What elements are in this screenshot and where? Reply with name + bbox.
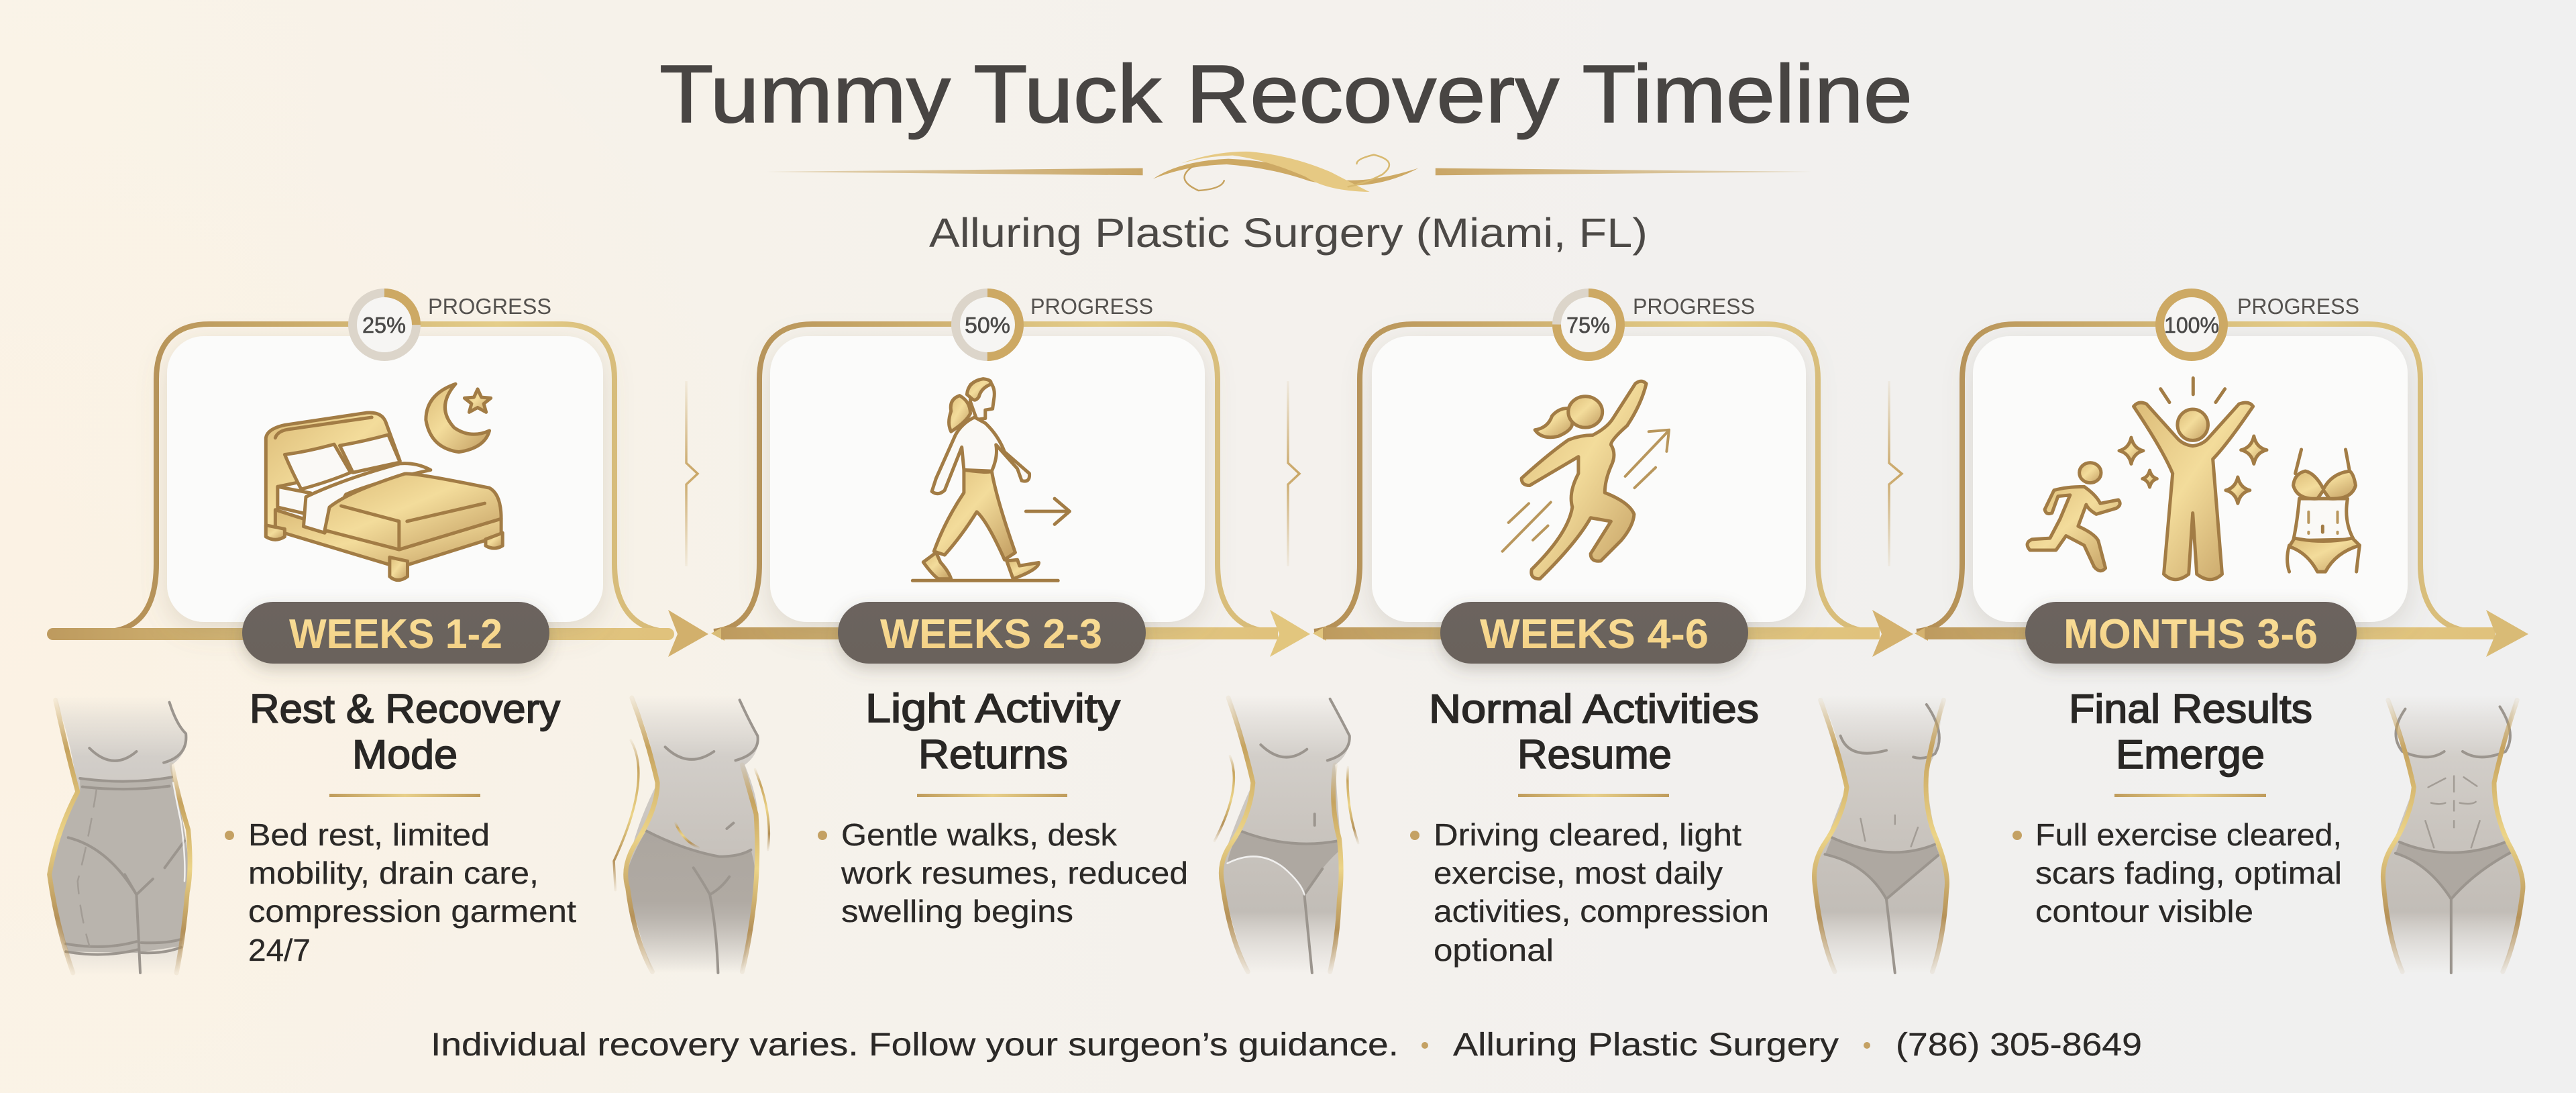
pill: months 3-6: MONTHS 3-6: [2063, 611, 2318, 658]
heading 1: Mode: [352, 732, 458, 777]
card 2: [770, 336, 1205, 622]
heading 2: Returns: [918, 732, 1068, 777]
frame 4: [1917, 324, 2470, 631]
bullet text 4: scars fading, optimal: [2035, 855, 2342, 890]
heading 3: Resume: [1517, 732, 1672, 777]
separator arrow 1: [686, 381, 698, 566]
progress ring 75%: 75%: [1566, 313, 1610, 337]
heading 1: Rest & Recovery: [250, 686, 560, 731]
heading underline 4: [2114, 794, 2266, 797]
ornamental divider: [766, 152, 1812, 192]
torso illustration: swollen abdomen: [614, 696, 769, 973]
heading 3: [1429, 686, 1759, 777]
torso illustration: compression garment: [50, 696, 190, 975]
torso illustration: slimmer waist: [1815, 696, 1947, 973]
footer: [431, 1027, 2142, 1063]
bullet text 1: mobility, drain care,: [248, 855, 539, 890]
heading underline 1: [329, 794, 480, 797]
progress label: PROGRESS: [428, 294, 551, 319]
bullet text 2: Gentle walks, desk: [841, 817, 1118, 852]
pill: weeks 2-3: [838, 602, 1146, 664]
bullet text 4: [2012, 817, 2342, 929]
torso illustration: final contour: [2383, 696, 2523, 973]
footer: (786) 305-8649: [1896, 1027, 2142, 1063]
bullet text 3: Driving cleared, light: [1434, 817, 1741, 852]
panel: weeks 1-2: [47, 293, 708, 664]
card 1: [167, 336, 603, 622]
card 3: [1372, 336, 1806, 622]
pill: weeks 2-3: WEEKS 2-3: [880, 611, 1102, 658]
bullet text 4: Full exercise cleared,: [2035, 817, 2342, 852]
progress label: PROGRESS: [1030, 294, 1153, 319]
title: Tummy Tuck Recovery Timeline: [659, 48, 1913, 140]
icon: active woman reaching up: [1503, 381, 1669, 579]
panel: weeks 4-6: [1313, 293, 1913, 664]
progress ring 75%: [1556, 293, 1621, 357]
panel: months 3-6: [1915, 293, 2528, 664]
heading 4: Emerge: [2116, 732, 2265, 777]
progress ring 100%: [2160, 293, 2223, 357]
bullet text 1: Bed rest, limited: [248, 817, 490, 852]
separator arrow 3: [1889, 381, 1902, 566]
progress ring 50%: [955, 293, 1020, 357]
icon: bed with moon and star: [266, 384, 502, 580]
progress ring 25%: 25%: [362, 313, 406, 337]
footer: Individual recovery varies. Follow your surgeon’s guidance.: [431, 1027, 1399, 1063]
progress ring 100%: 100%: [2164, 313, 2219, 337]
bullet text 1: [225, 817, 576, 968]
bullet text 1: compression garment: [248, 894, 576, 929]
footer: Alluring Plastic Surgery: [1453, 1027, 1839, 1063]
pill: weeks 4-6: WEEKS 4-6: [1480, 611, 1709, 658]
bullet text 3: [1410, 817, 1769, 968]
frame 3: [1314, 324, 1868, 631]
torso illustration: reduced swelling: [1214, 696, 1358, 973]
timeline arrow 2: [711, 610, 1310, 657]
heading 2: Light Activity: [865, 686, 1120, 731]
bullet text 3: activities, compression: [1434, 894, 1769, 929]
panel: weeks 2-3: [711, 293, 1310, 664]
icon: celebrating figure, runner and body: [2027, 378, 2359, 580]
timeline arrow 1: [47, 610, 708, 657]
timeline arrow 3: [1313, 610, 1913, 657]
heading 2: [865, 686, 1120, 777]
progress ring 25%: [353, 293, 416, 357]
pill: weeks 1-2: [242, 602, 549, 664]
heading underline 2: [917, 794, 1067, 797]
icon: walking woman: [912, 379, 1069, 580]
bullet text 2: swelling begins: [841, 894, 1073, 929]
heading 1: [250, 686, 560, 777]
frame 2: [714, 324, 1267, 631]
heading underline 3: [1518, 794, 1669, 797]
separator arrow 2: [1288, 381, 1299, 566]
heading 4: Final Results: [2069, 686, 2312, 731]
card 4: [1973, 336, 2408, 622]
bullet text 4: contour visible: [2035, 894, 2253, 929]
heading 3: Normal Activities: [1429, 686, 1759, 731]
timeline arrow 4: [1915, 610, 2528, 657]
subtitle: Alluring Plastic Surgery (Miami, FL): [929, 210, 1648, 256]
progress ring 50%: 50%: [965, 313, 1010, 337]
bullet text 3: optional: [1434, 933, 1554, 968]
bullet text 2: [818, 817, 1188, 929]
pill: weeks 1-2: WEEKS 1-2: [289, 611, 502, 658]
bullet text 2: work resumes, reduced: [841, 855, 1188, 890]
bullet text 3: exercise, most daily: [1434, 855, 1723, 890]
progress label: PROGRESS: [2237, 294, 2359, 319]
frame 1: [111, 324, 664, 631]
progress label: PROGRESS: [1633, 294, 1755, 319]
pill: weeks 4-6: [1440, 602, 1748, 664]
bullet text 1: 24/7: [248, 933, 311, 968]
pill: months 3-6: [2025, 602, 2357, 664]
heading 4: [2069, 686, 2312, 777]
